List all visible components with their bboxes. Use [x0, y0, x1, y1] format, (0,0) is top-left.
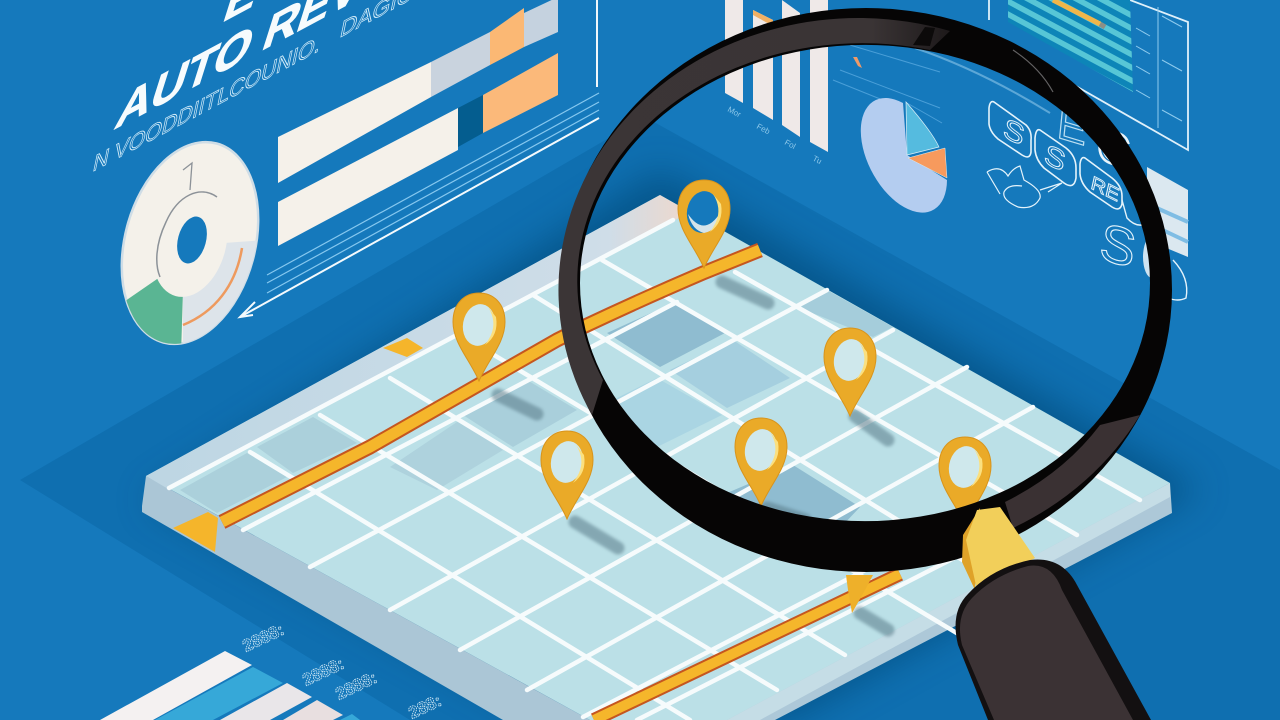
icon: badge one	[989, 102, 1031, 157]
pie chart	[861, 98, 947, 213]
slab drop shadow	[146, 170, 1200, 720]
icon: badge one: S	[1001, 111, 1027, 152]
shaded map cells	[180, 290, 893, 530]
arrow with guide lines	[240, 93, 599, 317]
bar chart: Tu	[811, 154, 823, 166]
icon: badge three: RE	[1089, 172, 1121, 206]
icons: outlined badges	[987, 97, 1146, 280]
subtitle text	[91, 0, 424, 178]
letter S: S	[1096, 212, 1140, 280]
lens ring	[560, 8, 1172, 572]
legend labels: 2888:	[333, 668, 380, 704]
ring lower-right highlight	[1005, 415, 1140, 528]
pin shadows	[498, 282, 888, 630]
letter U	[1122, 200, 1146, 225]
icon: location pin 3	[541, 431, 593, 519]
handle grip	[956, 560, 1151, 720]
chart guide lines	[833, 45, 942, 123]
top border strip	[146, 195, 690, 490]
ring notch	[913, 27, 935, 46]
striped table	[1008, 0, 1133, 92]
legend bars	[100, 651, 252, 720]
legend labels: 2888:	[300, 654, 347, 690]
icon: location pin 2	[453, 293, 505, 381]
bar chart: Fol	[783, 138, 797, 151]
legend labels	[240, 620, 445, 720]
icon: badge two	[1035, 130, 1076, 186]
donut gauge	[120, 140, 260, 346]
letter C: C	[1095, 121, 1132, 176]
lower right border strip	[727, 483, 1170, 720]
panel edge line	[596, 0, 598, 87]
right pale block	[1143, 167, 1188, 300]
icon: location pin 5	[735, 418, 787, 506]
panel: legend bars bottom left	[100, 620, 445, 720]
bar one	[278, 0, 558, 183]
letter E: E	[1055, 97, 1089, 156]
map platform	[142, 180, 1172, 720]
table column lines	[1136, 7, 1182, 128]
legend labels: 2888:	[240, 620, 287, 656]
handle collar	[962, 507, 1035, 590]
ring upper-left highlight	[558, 18, 950, 415]
bar chart: Feb	[755, 122, 772, 136]
road two	[594, 574, 900, 720]
subtitle text: N VOODDIITLCOUNIO.	[91, 30, 323, 178]
magnifying glass	[558, 8, 1172, 720]
icon: location pin 6	[939, 437, 991, 525]
slab side right	[715, 483, 1172, 720]
icon: badge three	[1080, 158, 1122, 209]
slab side left	[142, 476, 590, 720]
edge marker	[383, 338, 423, 357]
icon: location pin 7 partly hidden	[846, 575, 873, 613]
icon: face scribble	[987, 166, 1062, 208]
corner marker triangle	[173, 512, 218, 552]
panel: data table top right	[989, 0, 1188, 150]
lens glare streak	[915, 48, 1050, 113]
bar two	[278, 53, 558, 246]
ring inner reflection	[1013, 50, 1053, 92]
bar chart: Mor	[726, 105, 743, 119]
white grid lines	[169, 220, 1140, 720]
icon: badge two: S	[1042, 137, 1068, 178]
panel: auto review report	[91, 0, 599, 359]
road one	[222, 250, 760, 522]
map surface	[146, 195, 1170, 720]
panel: bar chart and pie	[725, 0, 947, 213]
icon: location pin 4	[824, 328, 876, 416]
icon: location pin 1	[678, 180, 730, 268]
panel outline	[989, 0, 1188, 150]
bar chart	[725, 0, 828, 166]
